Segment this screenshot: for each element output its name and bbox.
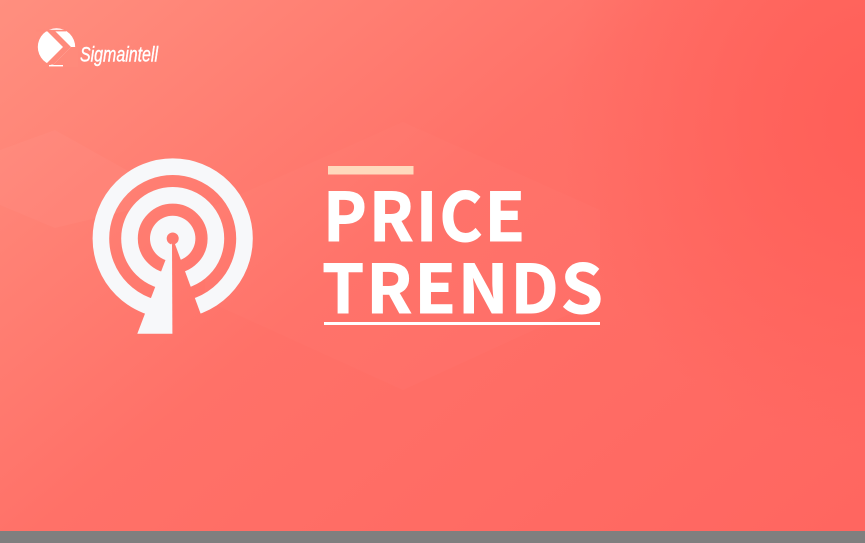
title line 1: PRICE [323,164,527,261]
logo [36,28,159,67]
bottom bar [0,531,865,543]
tower [137,243,172,334]
title [322,164,605,333]
icon: broadcast tower [101,167,244,334]
icon: logo mark [36,28,78,67]
inner disc [150,216,195,261]
middle ring [130,195,216,282]
center dot [167,232,179,244]
outer ring [101,167,244,310]
title line 2: TRENDS [322,236,605,333]
title underline [324,322,600,325]
accent bar [328,166,414,174]
logo text: Sigmaintell [80,44,159,66]
